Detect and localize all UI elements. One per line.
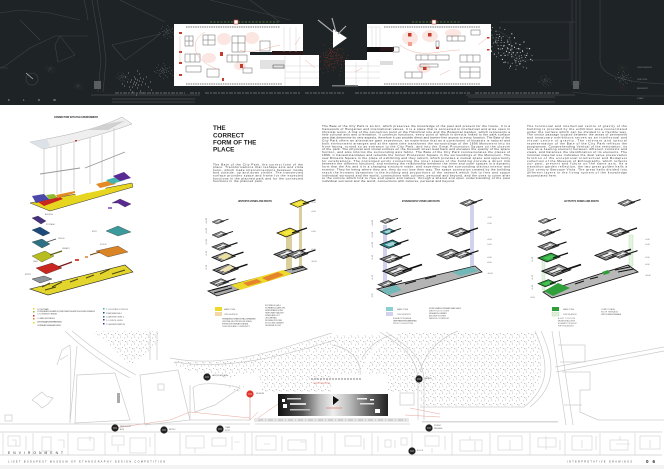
legend: EXHIBITION RESEARCH AREA (222, 322, 249, 326)
markers: viewpoints: BLOCK (417, 450, 424, 452)
dimension labels: +10.00 (206, 238, 208, 245)
dimension labels: +10.00 (372, 241, 374, 248)
small callouts: STORAGE (46, 223, 56, 226)
text block: functional centre: The visitor passage located between the areas of permanent (527, 133, 627, 137)
legend: EXHIBITION AREA (393, 317, 412, 320)
dimension labels: -6.00 (487, 257, 492, 259)
markers: viewpoints: METRO (169, 429, 176, 431)
legend: CHILDREN AND COMMUNITY (222, 325, 251, 328)
exploded red level (36, 259, 79, 274)
dimension labels: +2.50 (532, 274, 534, 280)
markers: viewpoints: TRAM (225, 426, 231, 429)
text block: intro: The Bate of the City Park, the correct form of the (213, 162, 303, 166)
exploded blue levels (32, 227, 56, 248)
title: the correct form of the place (213, 125, 256, 154)
text block: intro: and outside, up and down visible. The transmuted (213, 171, 303, 175)
text block: intro: point, which make interconnections between inside (213, 168, 303, 172)
legend (33, 308, 129, 327)
text block: main description (322, 124, 510, 183)
dimension labels: -10.00 (487, 273, 494, 275)
small callouts: CAFE (33, 260, 39, 263)
heading: environment: ENVIRONMENT (8, 451, 63, 455)
text block: main description: between the different functions, and ensuring the relationship between the inner and outer spaces in a dynamic (322, 162, 510, 166)
text block: intro: surface provides space and frame for the expected (213, 174, 303, 178)
exploded yellow base (30, 265, 133, 295)
heading: ACTIVITYS ZONES AND ROUTE (564, 200, 599, 203)
caption: interpretative drawings: INTERPRETATIVE DRAWINGS (567, 460, 632, 464)
small callouts: ENTRY (25, 274, 32, 276)
legend: 2.1 FLEXIBLE STUDIOS (106, 309, 129, 311)
dimension labels: +6.00 (206, 250, 208, 256)
band legend: STAFF (637, 97, 644, 100)
legend: CIRCULATION (563, 313, 577, 316)
title: the correct form of the place: FORM OF THE (213, 140, 256, 146)
dimension labels: +14.00 (206, 227, 208, 234)
text block: intro (213, 162, 303, 183)
legend: CIRCULATION (224, 313, 238, 316)
exploded orange level (85, 246, 128, 258)
legend: MAIN ZONE (397, 308, 409, 311)
legend: 2.4 OFFICE LEVEL (106, 320, 124, 322)
small callouts: OFFICE (58, 238, 65, 240)
dimension labels: -10.00 (645, 275, 652, 277)
left stack of floors (378, 218, 422, 288)
band legend: VISITORS (637, 79, 648, 81)
legend: RESEARCH LIBRARY (429, 312, 448, 315)
legend: ROOF TERRACE (601, 310, 619, 314)
text block: functional centre: representation of the Bate of the City Park reflects the (527, 141, 627, 145)
panel: environment site plan (0, 331, 664, 455)
left stack of floors (538, 218, 581, 287)
dimension labels: -6.00 (645, 257, 650, 259)
right stack of floors (595, 200, 640, 260)
legend: STUDY COLLECTION (393, 323, 414, 325)
text block: functional centre: and temporary exhibitions serves as an intellectual and (527, 136, 627, 140)
text block: functional centre: minimal material use indicates the dual value preservation (527, 153, 627, 157)
text block: main description: to the culture which link to free and space and values, through a shared and open understanding of the past (322, 176, 510, 180)
legend: MUSEUM ACCESS (558, 320, 576, 322)
panel: connection with the environment axonometric (25, 117, 133, 327)
legend: ARCHIVE STORES (429, 314, 447, 318)
dimension labels (372, 217, 494, 298)
legend: 2.3 ARCHIVE LEVEL 2 (106, 316, 125, 318)
legend: RESTAURANT (558, 324, 575, 328)
legend (386, 307, 462, 325)
text block: main description: framework of Hungarian and international values. It is a place that is connected to intellectual and arise open in (322, 127, 510, 131)
legend: 1.5 HISTORICAL ARCHIVE EXHIBITION HALL (37, 320, 63, 324)
legend: MAIN ZONE (224, 308, 236, 311)
exploded grey level (32, 276, 52, 283)
lower city blocks (3, 433, 660, 455)
legend: LECTURE HALL (265, 316, 278, 320)
dimension labels: -4.00 (645, 239, 650, 241)
legend: SERVICE CORRIDOR (429, 318, 450, 320)
right stack of floors (437, 200, 482, 259)
text block: main description: for celebrations. The prolonged entity connecting the inner spaces of the building provide a direct link (322, 159, 510, 163)
text block: functional centre: visual centre of gravity. The relevant and special (527, 138, 627, 142)
legend: VISITOR SERVICES AREA (601, 313, 622, 316)
caption: competition name: LIGET BUDAPEST MUSEUM OF ETHNOGRAPHY DESIGN COMPETITION (8, 460, 165, 464)
legend: 2.5 ADMINISTRATION (106, 323, 126, 326)
dimension labels: -10.00 (311, 261, 318, 263)
central building plan (278, 394, 388, 416)
legend: 1.3 COMMUNITY AREAS (37, 312, 58, 316)
dimension labels: +14.00 (372, 231, 374, 238)
legend (552, 307, 622, 328)
dimension labels: +2.50 (206, 264, 208, 270)
text block: functional centre: transition garden reflection, the two great golden halls a (527, 165, 627, 169)
band legend (637, 66, 652, 100)
text block: functional centre: collection of the Museum of Ethnography, which reflects (527, 159, 627, 163)
dimension labels: -4.00 (487, 239, 492, 241)
text block: main description: horizon, and also informs the surrounding axis fabric. The Bate of the City Park commemorates the places of (322, 150, 510, 154)
small callouts: EXPO (92, 231, 98, 233)
legend: 2.2 ARCHIVE LEVEL 1 (106, 312, 123, 315)
mid strip layer (40, 152, 125, 174)
dimension labels: -1.50 (487, 217, 492, 219)
legend: CENTRAL MULTIPURPOSE SPACE (222, 320, 253, 323)
heading: ETHNOGRAPHY ZONES AND ROUTE (402, 200, 440, 203)
markers: viewpoints: STREET (434, 425, 442, 427)
text block: functional centre: accumulated here. (527, 173, 557, 177)
dimension labels: -6.00 (311, 231, 316, 233)
band legend: RESIDENT (637, 88, 649, 90)
dimension labels: -8.00 (645, 264, 650, 266)
vertical circulation beams (286, 205, 302, 269)
dimension labels: +18.00 (372, 219, 374, 226)
text block: main description: new Mimesis Square is the place of exhibiting and they rebuilt, which provides a mutual space and opportunity (322, 156, 510, 160)
icon: white direction arrow (318, 18, 347, 48)
panel: ethnography zones and route (372, 200, 494, 325)
text block: functional centre: function of the exceptional intellectual and Budapest (527, 156, 627, 160)
dimension labels: -8.00 (487, 262, 492, 264)
text block: functional centre: building is provided by the exhibition area concentrated (527, 127, 627, 131)
dimension labels: +6.00 (532, 256, 534, 262)
markers: viewpoints: GARDEN (424, 377, 432, 380)
base floor with green zones (543, 265, 638, 298)
red context lines (115, 398, 440, 428)
dimension labels: -4.00 (311, 211, 316, 213)
text block: main description: City Park offers an alternative gate experience, an experience that as a constituent of kinaesis is natural and (322, 138, 510, 142)
dot clusters: people flow (46, 23, 632, 95)
legend: STAIRS AND LIFT (265, 314, 281, 317)
legend: ETHNOGRAPHIC RESEARCH ARCHIVES (429, 307, 462, 310)
dimension labels: +6.00 (372, 254, 374, 260)
legend: TEMPORARY ETHNOGRAPHY HALL (393, 320, 418, 322)
legend: AUDITORIUM (558, 317, 575, 320)
legend: TECHNICAL FLOOR (265, 324, 282, 327)
legend: STORE AND CLOAKROOM (265, 306, 285, 310)
text block: intro: functions in the planned park and for the connected (213, 176, 303, 180)
text block: main description: of the park. The physical and visual entities on the Kossuth street lead back and elevates the quality of the space (322, 147, 510, 151)
text block: main description: new cultural axis and orientation. It connects functions, every point of which is directly linked to the park surface (322, 133, 510, 137)
vertical circulation beams (542, 235, 633, 290)
text block: main description: 1896, it transubstantiates and rebuilds the former Procession Square in the surroundings of the Monument. The (322, 153, 510, 157)
text block: intro: functions in the planned park. (213, 179, 263, 183)
heading: connection with the environment: CONNECTION WITH THE ENVIRONMENT (54, 117, 99, 119)
legend: TEMPORARY GALLERY (265, 312, 285, 314)
legend: 1.6 RESEARCH AREA, ARCHIVES (37, 324, 62, 327)
text block: main description: front-facing, turned so as entrance to the City Park, and into the Great Procession Square on the closure (322, 144, 510, 148)
text block: functional centre: programme. Comprehending Vertical of the restoration, its (527, 144, 627, 148)
text block: main description: The Bate of the City Park is an Arc, which preserves the knowledge of the past and present for the future. It is a (322, 124, 510, 128)
dimension labels: -2.00 (487, 223, 492, 225)
band heading: flow: FLOW (8, 98, 56, 102)
legend: 1.1 COURTYARD (37, 308, 50, 311)
tree pattern (90, 331, 542, 407)
plan: left wing (174, 20, 323, 86)
panel: flow site plan band (0, 0, 664, 105)
dimension labels: +0.00 (532, 284, 534, 290)
dimension labels: -8.00 (311, 249, 316, 251)
legend: WORKSHOP ROOMS (265, 320, 283, 322)
small callouts: LIBRARY (62, 247, 70, 250)
exploded teal level (106, 226, 131, 236)
base floor with teal zones (377, 266, 482, 297)
exploded lime level (32, 251, 62, 262)
exploded purple levels (32, 199, 131, 224)
text block: main description: individual surround and the world, connections with cultures, personal and beyond, and the ones to come after (322, 173, 510, 177)
text block: main description: individual surround and the world, connections with cultures, personal and beyond. (322, 179, 455, 183)
text block: main description: reach the humans dynamism in the building and proportions of the network which link to free and space (322, 170, 510, 174)
markers: viewpoints: STOP (225, 430, 231, 432)
legend: EXHIBITION SHOP (558, 323, 578, 325)
roads and block outlines (0, 331, 664, 455)
text block: main description: area that determine its very aspects, therefore it can provide direct and barrier-free access to every function. The Bate of the (322, 136, 510, 140)
connecting columns (44, 128, 114, 196)
text block: functional centre: role as a bearing element between different contexts and (527, 147, 627, 151)
dimension labels: -5.00 (487, 244, 492, 246)
title: the correct form of the place: THE (213, 125, 226, 132)
park lower road band (422, 421, 558, 422)
legend: LOBBY STAGE (601, 308, 616, 311)
markers: viewpoints: MUSEUM (256, 393, 264, 395)
title: the correct form of the place: CORRECT (213, 132, 244, 139)
text block: functional centre: 21st century Baroque Vista. The great halls divided into (527, 168, 627, 172)
legend: MAIN ZONE (563, 308, 575, 311)
dimension labels: +2.50 (372, 274, 374, 280)
dimension labels: -3.50 (372, 293, 374, 298)
text block: intro: place. Transformations that reshape axis and vista (213, 165, 303, 169)
bottom strip (0, 465, 664, 469)
small callouts: ARCHIVE (45, 213, 54, 216)
dimension labels (530, 239, 652, 299)
text block: main description: built environment arranges and at the same time transforms the surroundings of the 1896 Monument into its (322, 141, 510, 145)
legend: MEETING ROOMS (429, 310, 450, 312)
text block: functional centre: The functional and intellectual centre of gravity of the (527, 124, 627, 128)
dimension labels: -5.00 (645, 244, 650, 246)
markers: viewpoints: HEROES SQUARE (212, 374, 228, 377)
small callouts: STUDIO (100, 244, 107, 246)
building band below plan (254, 418, 409, 422)
base floor with yellow zone (208, 266, 307, 296)
dimension labels: -3.50 (530, 297, 535, 299)
dimension labels: -1.50 (311, 202, 316, 204)
text block: functional centre (527, 124, 627, 177)
text block: main description: physical terms. A link of the connection point of the Historical site and the Botanical Garden, which represents a (322, 130, 510, 134)
vertical circulation beams (383, 205, 474, 289)
legend: 1.2 PERMANENT EXHIBITION, TEMPORARY EXHIBITION, EDUCATION SPACES (37, 310, 96, 313)
text block: functional centre: under the surface which can be divided in a flexible way. (527, 130, 627, 134)
left stack of floors (210, 219, 248, 286)
markers: viewpoints: AXIS (120, 428, 125, 431)
markers: viewpoints: PASSAGE (434, 427, 443, 430)
legend: 1.4 MAIN ENTRANCE (37, 317, 56, 320)
yellow ground floor assembly (30, 172, 133, 211)
page number: 06 (646, 459, 655, 464)
legend: ENTRANCE HALL (265, 304, 282, 307)
text block: main description: form that the Arc and it is a changing structure made, and experienc-ing the surrounding distinct interior and (322, 165, 510, 169)
dimension labels: +18.00 (206, 217, 208, 224)
monument wall (311, 379, 362, 383)
text block: main description: exterior. They be being where they are, they do not lose their way. The space connection created by the building (322, 168, 510, 172)
legend: PERMANENT EXHIBITION HALL SEPARATED (222, 318, 257, 320)
small callouts (25, 213, 107, 276)
title: the correct form of the place: PLACE (213, 146, 234, 154)
band legend: CIRCULATION (637, 66, 652, 69)
heading: HISTORYS ZONES AND ROUTE (238, 200, 272, 203)
legend: PEDESTRIAN ROUTES (265, 309, 284, 312)
panel: activities zones and route (530, 200, 652, 328)
text block: functional centre: views, and balances the identification of its elements. The (527, 150, 627, 154)
legend: CIRCULATION (397, 313, 411, 316)
plan: right wing (332, 20, 491, 86)
text block: functional centre: our past, present and future on the same axis. As a (527, 162, 627, 166)
roof layer (30, 117, 132, 149)
markers: viewpoints: PARK ENTRY (120, 425, 132, 428)
markers: viewpoints (111, 373, 443, 455)
legend: STUDY AND LIBRARY (265, 322, 285, 324)
panel: historys zones and route (206, 200, 318, 328)
right stack of floors (274, 200, 316, 259)
legend (215, 304, 285, 328)
dimension labels (206, 202, 318, 270)
text block: functional centre: different layers in the living system of the knowledge (527, 170, 627, 174)
